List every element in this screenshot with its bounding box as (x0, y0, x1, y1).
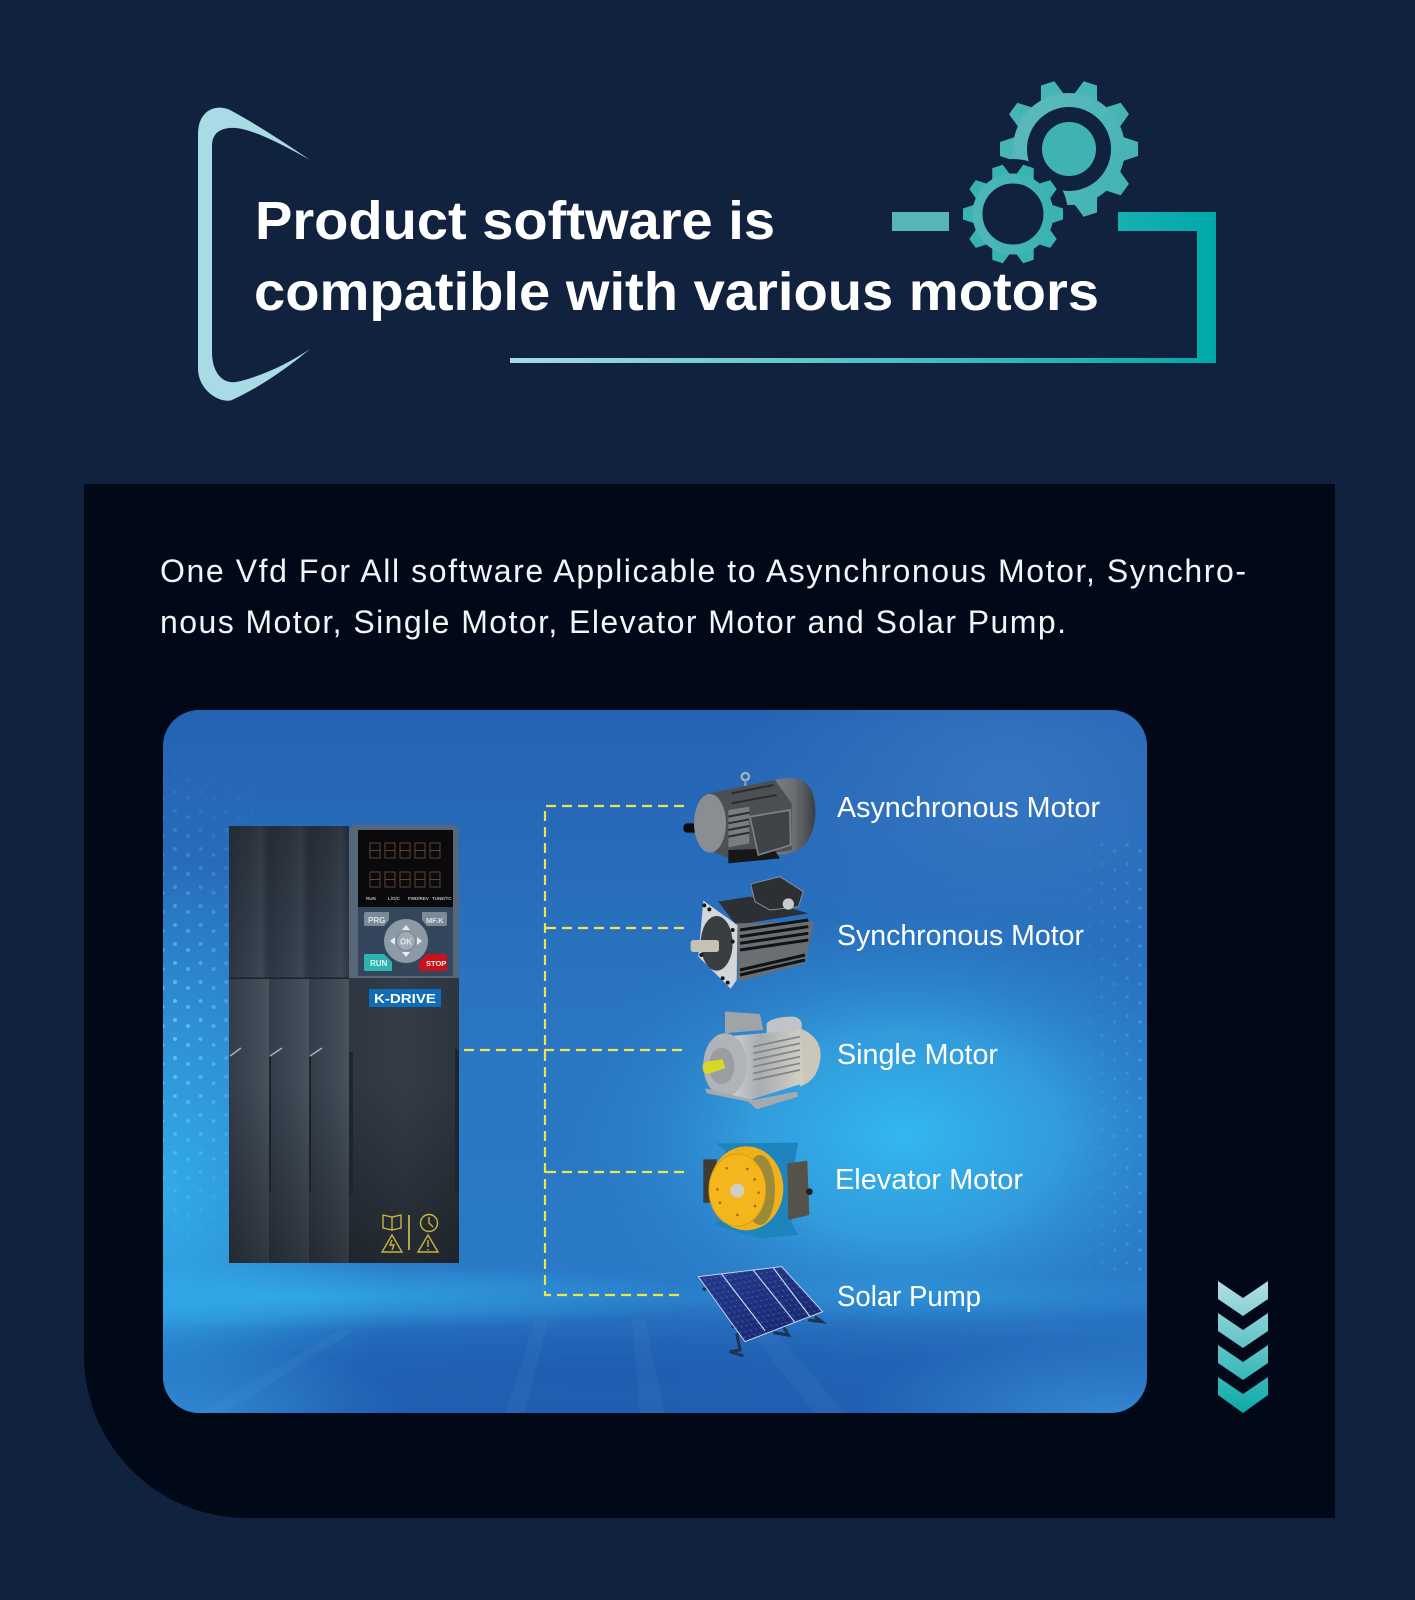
motor labels: Solar Pump (837, 1281, 981, 1313)
title (254, 191, 1099, 322)
description text: One Vfd For All software Applicable to Asynchronous Motor, Synchro- (160, 553, 1246, 589)
title: compatible with various motors (254, 262, 1099, 322)
title: Product software is (255, 191, 775, 251)
motor labels: Elevator Motor (835, 1164, 1023, 1196)
inverter front cover (349, 978, 459, 1263)
motor: synchronous (691, 877, 814, 989)
motor labels (835, 792, 1100, 1313)
safety icons (382, 1214, 438, 1252)
icon: gears (958, 80, 1138, 269)
header dash (892, 212, 949, 231)
connector lines (464, 806, 684, 1295)
header frame: right bracket and underline (510, 212, 1216, 363)
motor: elevator (703, 1143, 813, 1238)
inverter keypad: OK (400, 938, 412, 946)
inverter keypad: PRG (368, 916, 385, 925)
motor labels: Single Motor (837, 1039, 998, 1071)
inverter keypad: TUNE/TC (432, 896, 452, 901)
inverter keypad: FWD/REV (408, 896, 429, 901)
panel: dark content panel (84, 484, 1335, 1518)
inverter keypad: MF.K (426, 916, 444, 925)
icon: solar panel (698, 1267, 823, 1356)
inverter keypad: RUN (366, 896, 376, 901)
inverter heat-sink fins (229, 826, 357, 1263)
motor: single phase (703, 1012, 821, 1109)
motor labels: Synchronous Motor (837, 920, 1084, 952)
inverter keypad: STOP (426, 959, 446, 968)
description text: nous Motor, Single Motor, Elevator Motor and Solar Pump. (160, 604, 1066, 640)
K-DRIVE badge: K-DRIVE (374, 992, 436, 1006)
motor: asynchronous (683, 773, 815, 863)
inverter keypad: L/O/C (388, 896, 401, 901)
motor labels: Asynchronous Motor (837, 792, 1100, 824)
panel: blue product card (163, 710, 1147, 1413)
product: K-DRIVE inverter (229, 825, 459, 1263)
inverter keypad: RUN (370, 959, 388, 968)
inverter keypad (349, 825, 459, 978)
K-DRIVE badge (369, 989, 441, 1007)
header frame: left bracket (198, 108, 310, 401)
icon: down chevrons (1218, 1281, 1268, 1413)
description text (160, 553, 1246, 640)
